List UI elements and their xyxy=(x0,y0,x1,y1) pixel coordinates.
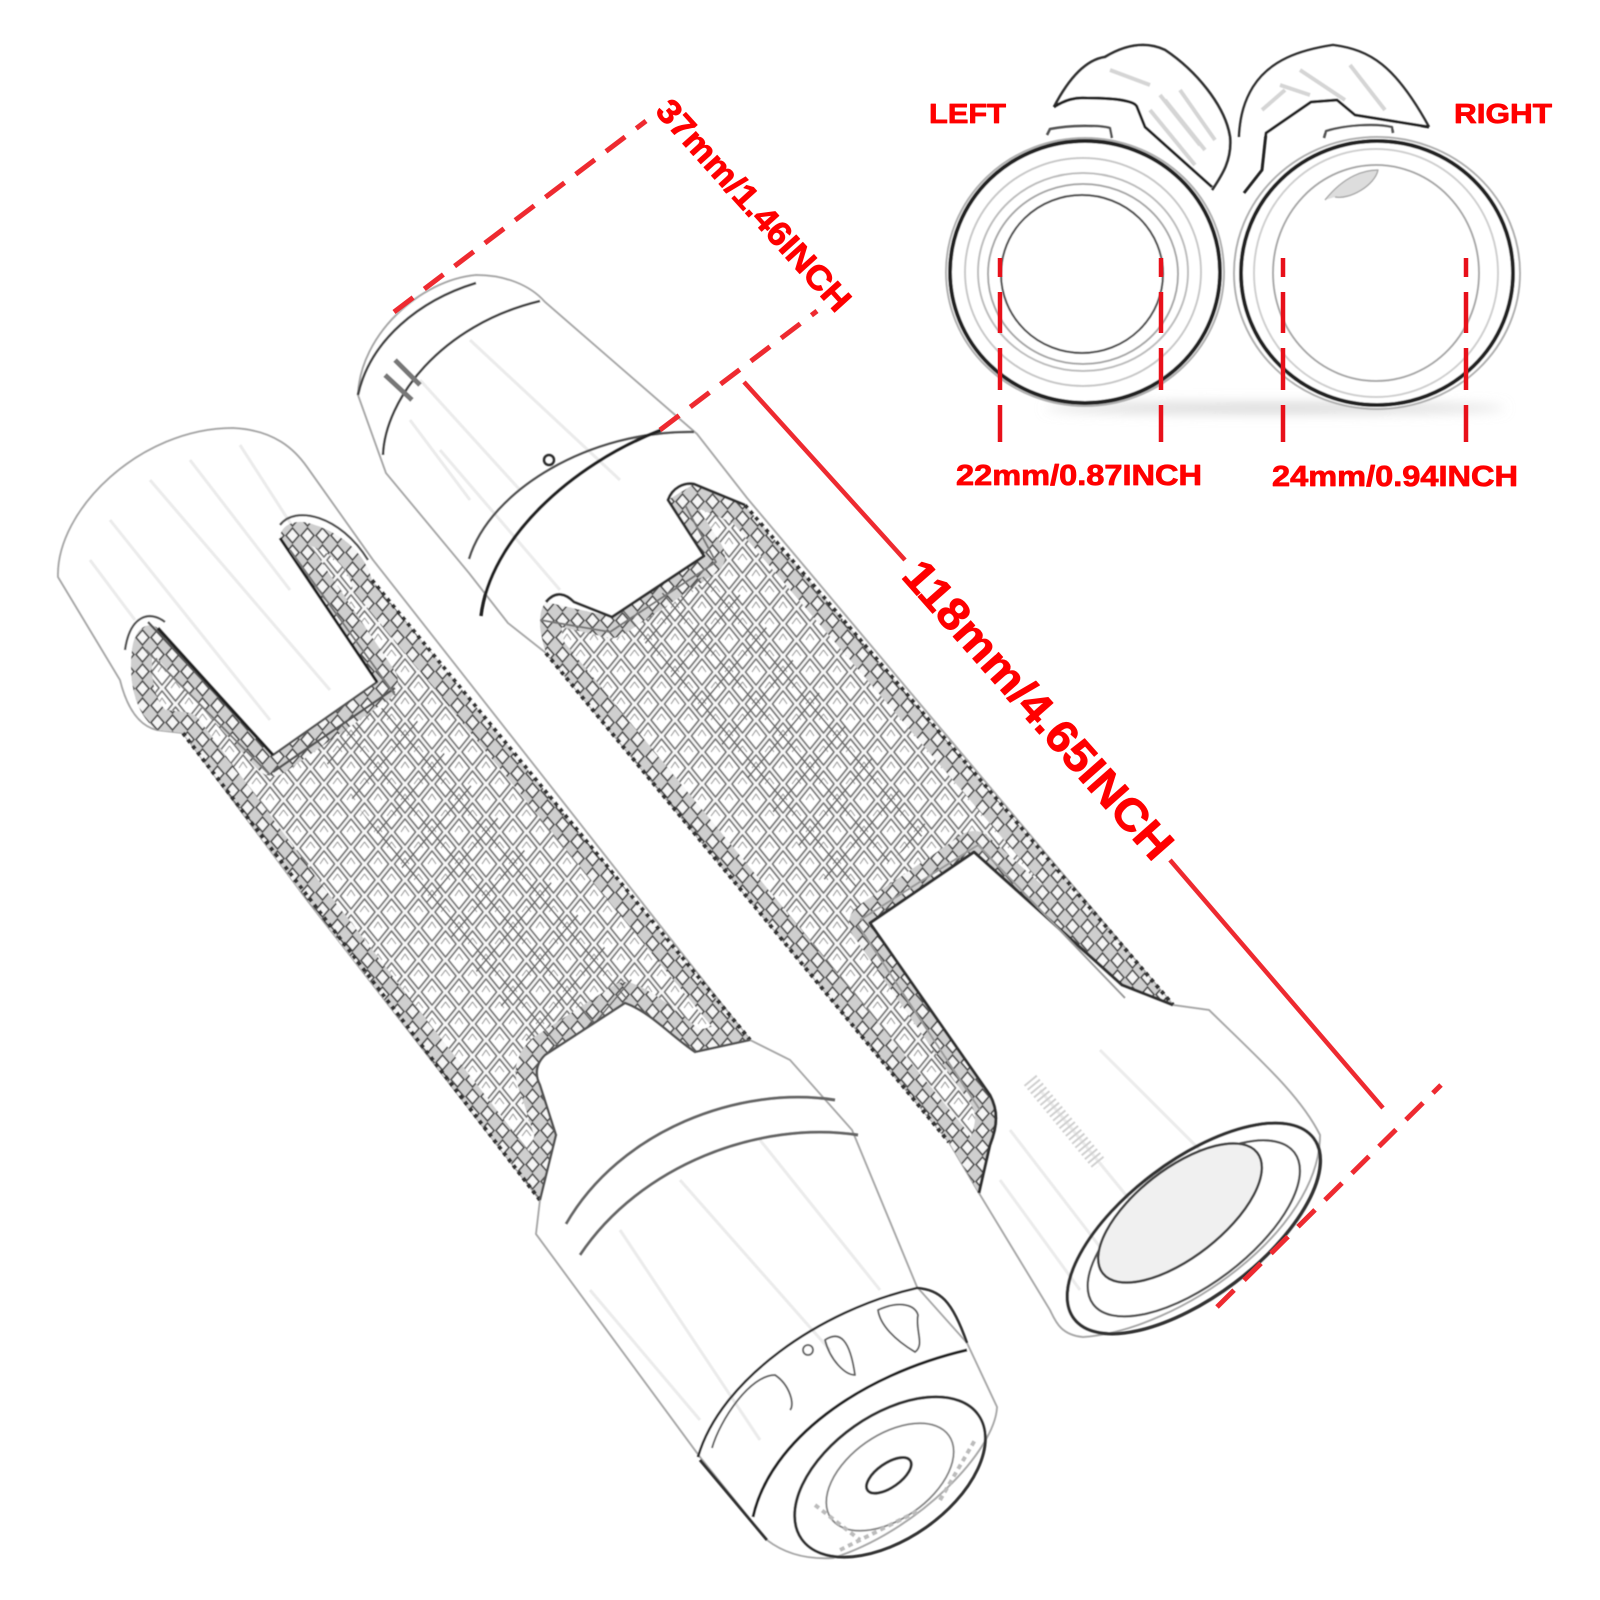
cap shading streaks xyxy=(410,340,1210,1290)
left end: tab xyxy=(1047,126,1112,138)
label: 22mm: 22mm/0.87INCH xyxy=(956,460,1202,492)
knurled grip surface xyxy=(540,484,1173,1193)
collar ring xyxy=(566,1097,858,1255)
dashed line: upper extension xyxy=(394,121,646,312)
grip body outline xyxy=(358,275,1320,1337)
upper tongue outline xyxy=(125,515,395,772)
label: 118mm: 118mm/4.65INCH xyxy=(893,550,1184,870)
top knob rings xyxy=(358,283,540,455)
upper notch outline xyxy=(546,484,745,617)
label: 37mm: 37mm/1.46INCH xyxy=(648,92,858,319)
dashed line: right end xyxy=(1217,1085,1441,1307)
dimension: 24mm inner diameter xyxy=(1272,258,1518,493)
knurl edges xyxy=(183,580,750,1200)
dashed guides xyxy=(1283,258,1466,442)
dashed guides xyxy=(1000,258,1161,442)
left end ring xyxy=(946,138,1224,406)
knurl edges xyxy=(546,505,1173,1142)
label: 24mm: 24mm/0.94INCH xyxy=(1272,461,1518,493)
left end: rear body xyxy=(1054,45,1230,190)
end knob notches xyxy=(712,1305,920,1448)
label: LEFT: LEFT xyxy=(929,98,1006,129)
solid line: lower xyxy=(1170,860,1383,1108)
knurled grip surface xyxy=(131,522,750,1200)
end knob rings xyxy=(698,1288,967,1457)
dimension: 118mm length xyxy=(744,382,1441,1307)
bench shadow xyxy=(1045,403,1505,413)
left grip drawing xyxy=(58,428,1014,1590)
inner bore xyxy=(1076,1118,1284,1308)
right end: rear body xyxy=(1239,45,1429,137)
lower tongue outline xyxy=(537,1003,750,1200)
dashed line: lower extension xyxy=(660,311,817,430)
label: RIGHT: RIGHT xyxy=(1454,98,1552,129)
top-right end view photo xyxy=(946,45,1520,413)
cap shading streaks xyxy=(90,445,880,1440)
end face xyxy=(766,1364,1014,1590)
right end: tab xyxy=(1324,125,1393,138)
collar ring xyxy=(469,432,694,559)
lower window outline xyxy=(870,852,1173,1193)
open end rings xyxy=(1033,1084,1355,1373)
right grip drawing xyxy=(358,275,1355,1373)
grip body outline xyxy=(58,428,997,1558)
dimension: 22mm inner diameter xyxy=(956,258,1202,492)
dimension: 37mm top width xyxy=(394,92,858,430)
solid line: upper xyxy=(744,382,905,560)
right end ring xyxy=(1234,137,1520,409)
